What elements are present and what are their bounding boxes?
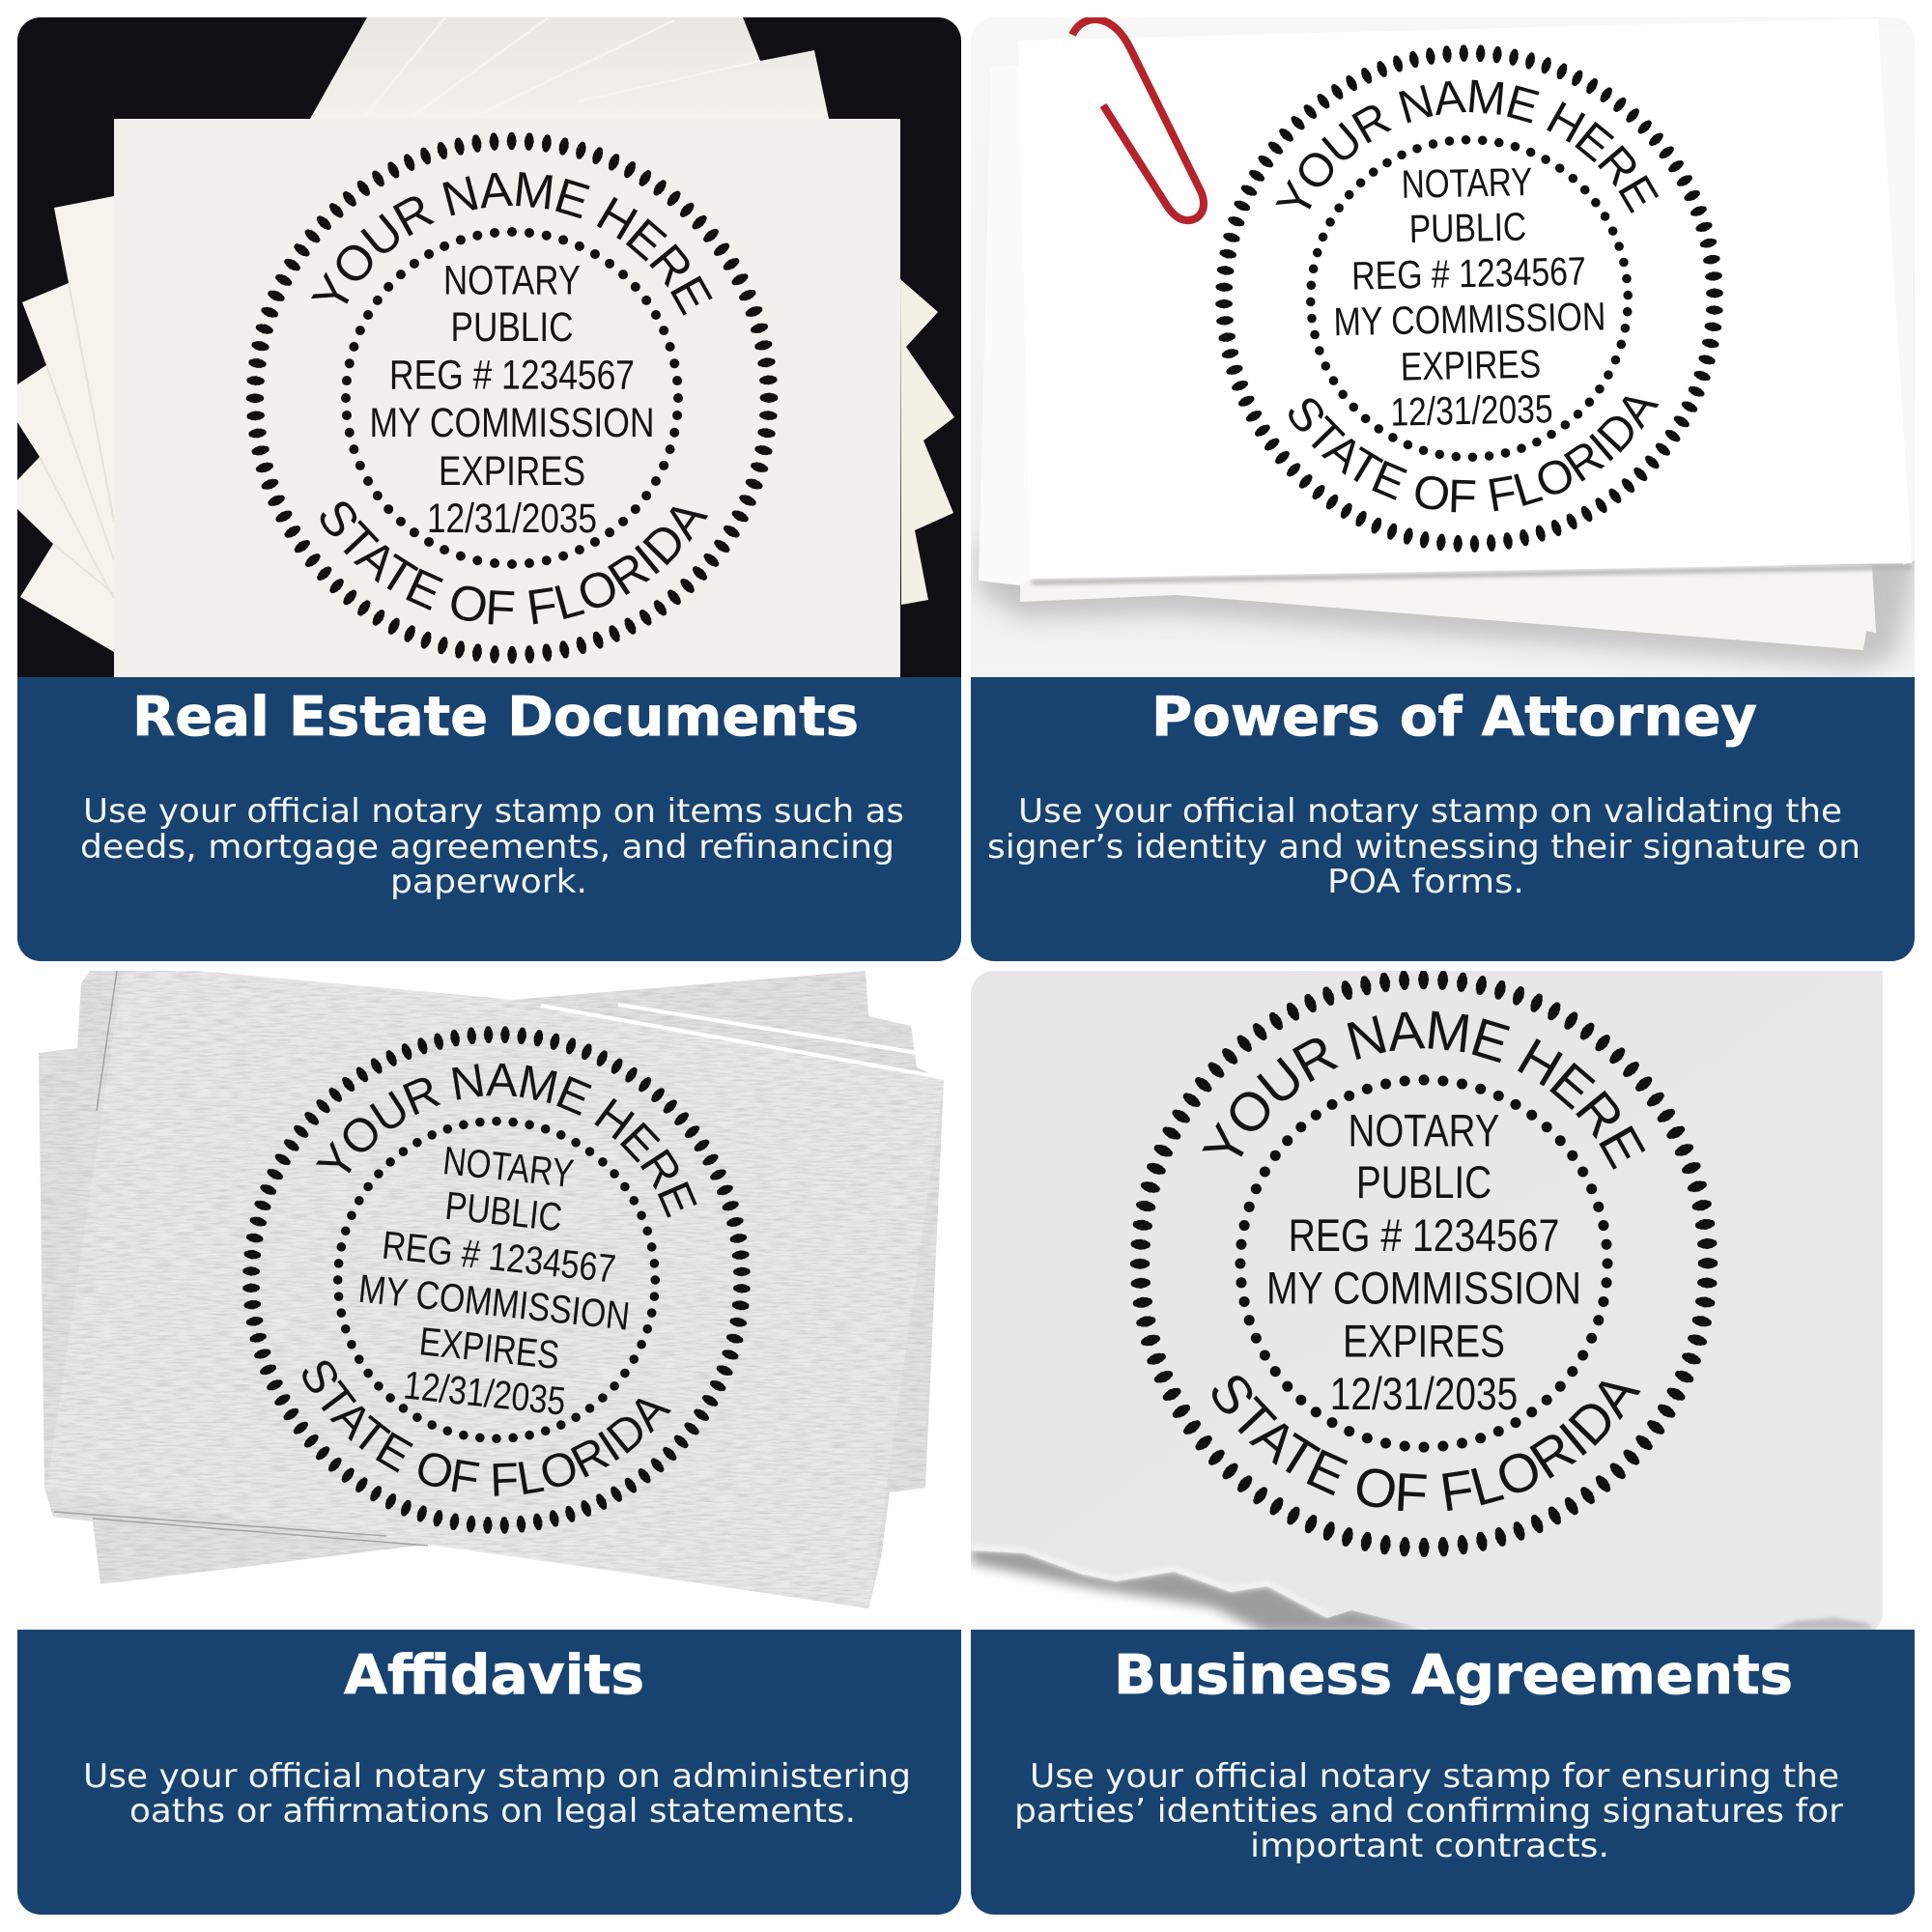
text block: POA forms. bbox=[1327, 863, 1524, 901]
text block bbox=[83, 1757, 911, 1831]
stamp impression: NOTARY bbox=[1349, 1105, 1499, 1156]
stamp impression: PUBLIC bbox=[450, 304, 574, 351]
stamp impression: STATE OF FLORIDA bbox=[1289, 396, 1660, 512]
stamp impression: PUBLIC bbox=[443, 1183, 564, 1239]
text block: deeds, mortgage agreements, and refinancing bbox=[80, 828, 895, 867]
stamp impression: REG # 1234567 bbox=[380, 1223, 618, 1292]
panel: Powers of Attorney bbox=[971, 17, 1915, 961]
stamp impression: STATE OF FLORIDA bbox=[1211, 1376, 1641, 1511]
stamp impression: REG # 1234567 bbox=[1289, 1210, 1559, 1262]
photo: stamped textured cards bbox=[17, 971, 961, 1915]
stamp impression: REG # 1234567 bbox=[389, 352, 635, 398]
stamp impression bbox=[1130, 971, 1718, 1557]
stamp impression: MY COMMISSION bbox=[1266, 1263, 1581, 1314]
text block: Use your official notary stamp on validating the bbox=[1018, 792, 1842, 831]
stamp impression: YOUR NAME HERE bbox=[1202, 1010, 1646, 1170]
stamp impression: PUBLIC bbox=[1408, 205, 1527, 251]
text block: Use your official notary stamp on administering bbox=[83, 1757, 911, 1796]
stamp impression: YOUR NAME HERE bbox=[315, 1064, 697, 1218]
heading: Business Agreements bbox=[1114, 1644, 1793, 1707]
stamp impression: EXPIRES bbox=[1400, 342, 1541, 389]
stamp impression: 12/31/2035 bbox=[1330, 1369, 1518, 1420]
text block: important contracts. bbox=[1250, 1827, 1609, 1865]
text block bbox=[987, 792, 1861, 901]
paper texture bbox=[39, 971, 944, 1608]
stamp impression: 12/31/2035 bbox=[402, 1362, 568, 1424]
stamp impression: REG # 1234567 bbox=[1351, 249, 1586, 298]
heading: Real Estate Documents bbox=[132, 686, 859, 749]
text block: Use your official notary stamp on items such as bbox=[83, 792, 904, 831]
stamp impression: PUBLIC bbox=[1356, 1157, 1492, 1208]
text block: oaths or affirmations on legal statements. bbox=[129, 1792, 856, 1831]
photo: stamped cream cards on black bbox=[17, 17, 961, 961]
stamp impression bbox=[245, 131, 779, 665]
text block: parties’ identities and confirming signatures for bbox=[1014, 1792, 1843, 1831]
stamp impression: STATE OF FLORIDA bbox=[321, 501, 709, 624]
stamp impression: NOTARY bbox=[1401, 159, 1533, 207]
stamp impression: EXPIRES bbox=[439, 448, 585, 495]
stamp impression: EXPIRES bbox=[417, 1319, 561, 1378]
stamp impression: MY COMMISSION bbox=[1333, 294, 1606, 344]
heading: Powers of Attorney bbox=[1151, 686, 1757, 749]
photo: stamped torn paper bbox=[971, 971, 1915, 1915]
heading: Affidavits bbox=[344, 1644, 644, 1707]
stamp impression: NOTARY bbox=[443, 257, 581, 303]
text block: Use your official notary stamp for ensuring the bbox=[1030, 1757, 1839, 1796]
stamp impression: MY COMMISSION bbox=[369, 400, 655, 446]
photo: stamped white sheets with paperclip bbox=[971, 17, 1915, 961]
stamp impression bbox=[1215, 44, 1723, 553]
panel: Affidavits bbox=[17, 971, 961, 1915]
stamp impression: 12/31/2035 bbox=[1390, 386, 1553, 435]
panel: Business Agreements bbox=[971, 971, 1915, 1915]
stamp impression: MY COMMISSION bbox=[356, 1266, 632, 1339]
text block: signer’s identity and witnessing their signature on bbox=[987, 828, 1861, 867]
stamp impression: YOUR NAME HERE bbox=[311, 172, 713, 316]
text block bbox=[80, 792, 904, 901]
stamp impression: YOUR NAME HERE bbox=[1275, 79, 1660, 213]
stamp impression: 12/31/2035 bbox=[427, 496, 597, 542]
panel: Real Estate Documents bbox=[17, 17, 961, 961]
icon: red paperclip bbox=[1072, 19, 1204, 220]
stamp impression bbox=[242, 1026, 751, 1534]
stamp impression: NOTARY bbox=[440, 1138, 576, 1196]
text block bbox=[1014, 1757, 1843, 1865]
text block: paperwork. bbox=[390, 863, 587, 901]
stamp impression: STATE OF FLORIDA bbox=[302, 1360, 671, 1496]
stamp impression: EXPIRES bbox=[1343, 1317, 1505, 1368]
